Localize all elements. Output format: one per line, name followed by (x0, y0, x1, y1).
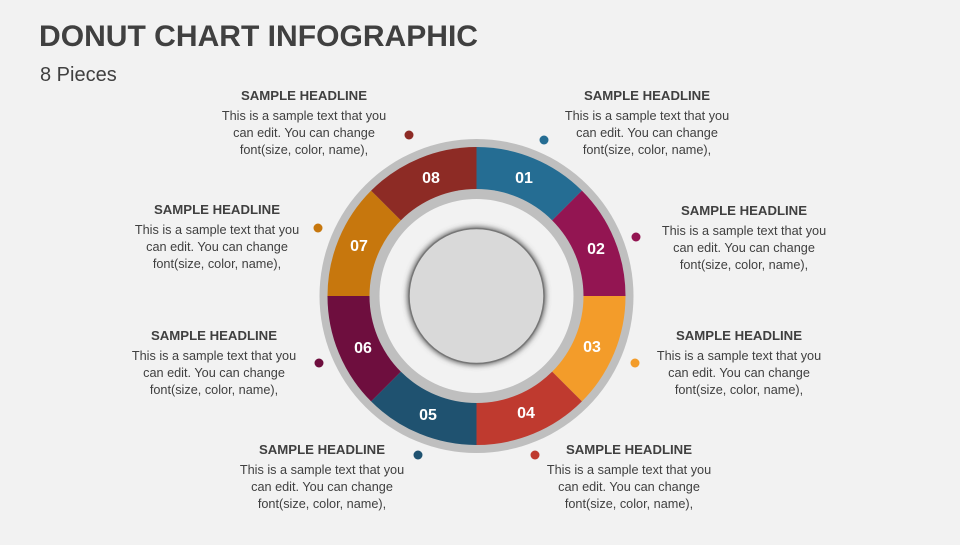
text blocks: This is a sample text that you (662, 224, 826, 238)
donut chart (320, 139, 634, 453)
title: DONUT CHART INFOGRAPHIC (39, 20, 478, 53)
donut chart: 05 (419, 407, 437, 424)
donut chart: 04 (517, 405, 535, 422)
text blocks: font(size, color, name), (583, 143, 711, 157)
text blocks: SAMPLE HEADLINE (151, 328, 277, 343)
text blocks: can edit. You can change (576, 126, 718, 140)
text blocks: SAMPLE HEADLINE (566, 442, 692, 457)
text blocks: font(size, color, name), (675, 383, 803, 397)
text blocks: This is a sample text that you (565, 109, 729, 123)
text blocks: This is a sample text that you (222, 109, 386, 123)
text blocks: This is a sample text that you (547, 463, 711, 477)
text blocks: can edit. You can change (558, 480, 700, 494)
text blocks: SAMPLE HEADLINE (681, 203, 807, 218)
text blocks: can edit. You can change (673, 241, 815, 255)
donut chart: 08 (422, 170, 440, 187)
text blocks: can edit. You can change (146, 240, 288, 254)
text blocks (132, 88, 826, 511)
text blocks: font(size, color, name), (565, 497, 693, 511)
donut chart: 01 (515, 170, 533, 187)
donut chart: 07 (350, 238, 368, 255)
text blocks: SAMPLE HEADLINE (676, 328, 802, 343)
subtitle: 8 Pieces (40, 64, 117, 86)
donut chart: 02 (587, 241, 605, 258)
text blocks: This is a sample text that you (657, 349, 821, 363)
text blocks: font(size, color, name), (150, 383, 278, 397)
donut chart: 06 (354, 340, 372, 357)
text blocks: SAMPLE HEADLINE (241, 88, 367, 103)
text blocks: This is a sample text that you (132, 349, 296, 363)
text blocks: font(size, color, name), (153, 257, 281, 271)
text blocks: This is a sample text that you (240, 463, 404, 477)
text blocks: font(size, color, name), (258, 497, 386, 511)
text blocks: can edit. You can change (233, 126, 375, 140)
dots (314, 130, 640, 460)
text blocks: font(size, color, name), (240, 143, 368, 157)
text blocks: can edit. You can change (668, 366, 810, 380)
text blocks: SAMPLE HEADLINE (584, 88, 710, 103)
text blocks: SAMPLE HEADLINE (259, 442, 385, 457)
donut chart: 03 (583, 339, 601, 356)
text blocks: This is a sample text that you (135, 223, 299, 237)
text blocks: can edit. You can change (251, 480, 393, 494)
text blocks: can edit. You can change (143, 366, 285, 380)
text blocks: font(size, color, name), (680, 258, 808, 272)
text blocks: SAMPLE HEADLINE (154, 202, 280, 217)
